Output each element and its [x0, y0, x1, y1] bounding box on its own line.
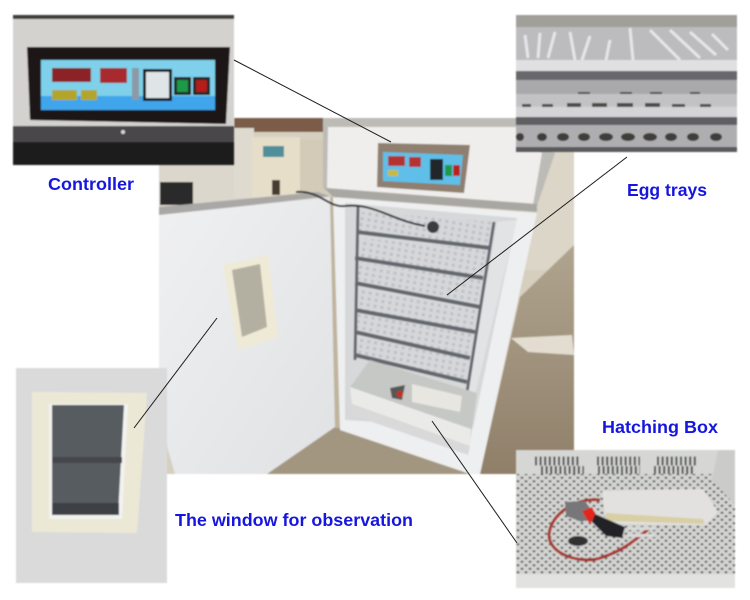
instruction sheet — [602, 489, 718, 525]
thermometer handle — [565, 501, 655, 546]
power cable — [296, 192, 425, 226]
hatching box — [350, 360, 477, 455]
egg tray dividers — [525, 28, 728, 60]
blue control panel — [41, 60, 215, 110]
label: hatching box: Hatching Box — [602, 417, 718, 437]
photo background: workshop — [159, 118, 574, 474]
incubator door — [159, 192, 340, 474]
cabinet top box — [323, 118, 555, 212]
door window — [223, 255, 278, 350]
leader line: egg trays — [447, 157, 627, 295]
main photo: incubator — [159, 118, 574, 474]
cabinet body — [333, 197, 537, 474]
inset: egg trays photo — [516, 15, 737, 152]
inset: controller photo — [13, 15, 234, 165]
tray support bars — [355, 207, 494, 392]
leader line: window — [134, 318, 217, 428]
red hose — [549, 500, 650, 560]
inset: observation window photo — [16, 368, 167, 583]
cabinet controller panel — [377, 143, 470, 193]
label: controller: Controller — [48, 174, 134, 194]
label: window for observation: The window for observation — [175, 510, 413, 530]
leader line: hatching box — [432, 421, 517, 543]
egg tray surfaces — [355, 212, 492, 382]
inset: hatching box photo — [516, 450, 735, 588]
label: egg trays: Egg trays — [627, 180, 707, 200]
leader line: controller — [234, 60, 391, 142]
window glass — [52, 405, 124, 515]
